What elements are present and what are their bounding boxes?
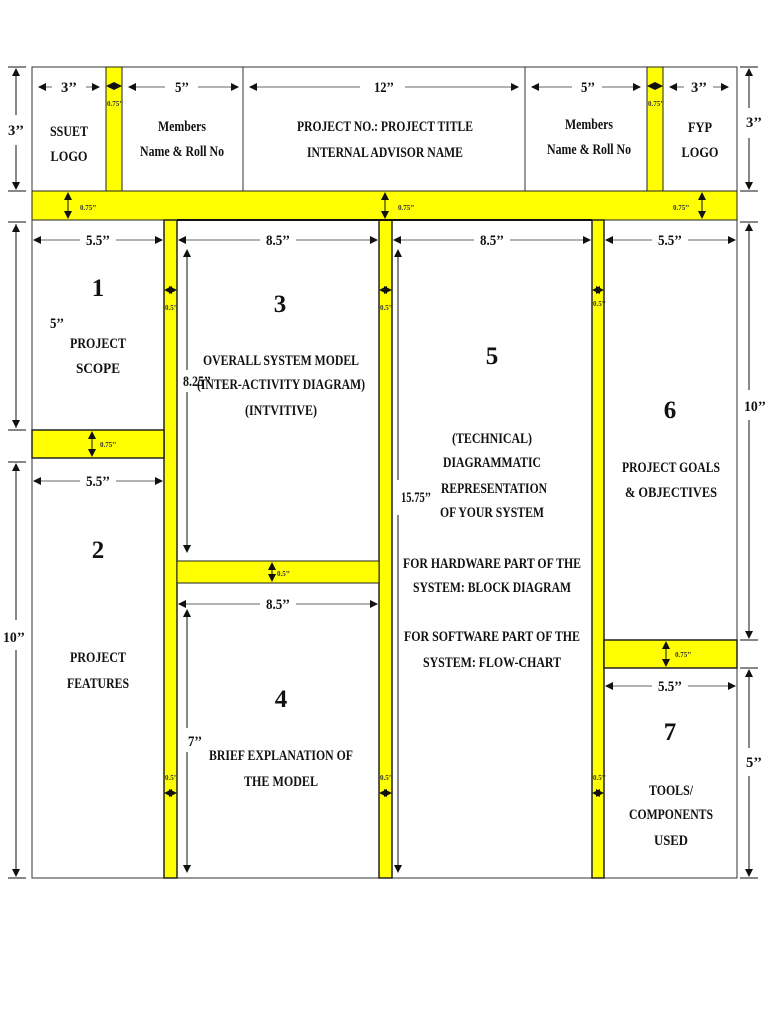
panel 7: tools: TOOLS/ bbox=[649, 783, 694, 799]
outer vertical dimensions: 3’’ bbox=[8, 123, 24, 139]
small dimension labels: 0.5’’ bbox=[165, 774, 178, 782]
header: members right: Members bbox=[565, 117, 613, 133]
panel 6: project goals: PROJECT GOALS bbox=[622, 460, 720, 476]
header: members left: 5’’ bbox=[175, 80, 189, 96]
small dimension labels: 0.5’’ bbox=[593, 774, 606, 782]
panel 5: technical diagram: 5 bbox=[486, 343, 498, 370]
header: SSUET logo: LOGO bbox=[50, 149, 88, 165]
panel 7: tools: 5.5’’ bbox=[658, 679, 682, 695]
panel 7: tools: 7 bbox=[664, 719, 676, 746]
panel 7: tools bbox=[606, 679, 735, 849]
panel 2: project features: 2 bbox=[92, 537, 104, 564]
header: members right: 5’’ bbox=[581, 80, 595, 96]
small dimension labels: 0.75’’ bbox=[107, 100, 123, 108]
small dimension labels: 0.75’’ bbox=[675, 651, 691, 659]
panel 5: technical diagram: FOR SOFTWARE PART OF THE bbox=[404, 629, 580, 645]
panel 5: technical diagram: SYSTEM: FLOW-CHART bbox=[423, 655, 561, 671]
panel 3: overall system model bbox=[179, 233, 377, 552]
header: members right bbox=[532, 80, 640, 158]
panel 1: project scope: 5.5’’ bbox=[86, 233, 110, 249]
outer vertical dimensions bbox=[3, 67, 766, 878]
small dimension labels: 0.75’’ bbox=[80, 204, 96, 212]
panel 5: technical diagram: FOR HARDWARE PART OF THE bbox=[403, 556, 581, 572]
small dimension labels bbox=[68, 86, 702, 782]
panel 1: project scope: 5’’ bbox=[50, 316, 64, 332]
yellow separators bbox=[32, 67, 737, 878]
small dimension labels: 0.75’’ bbox=[673, 204, 689, 212]
panel 2: project features bbox=[34, 474, 162, 692]
panel 5: technical diagram: SYSTEM: BLOCK DIAGRAM bbox=[413, 580, 571, 596]
panel 5: technical diagram: 15.75’’ bbox=[401, 490, 431, 506]
column width arrows bbox=[165, 290, 603, 793]
panel 3: overall system model: OVERALL SYSTEM MODEL bbox=[203, 353, 359, 369]
panel 6: project goals bbox=[606, 233, 735, 501]
small dimension labels: 0.5’’ bbox=[165, 304, 178, 312]
header: project title: INTERNAL ADVISOR NAME bbox=[307, 145, 463, 161]
header: SSUET logo: 3’’ bbox=[61, 80, 77, 96]
header: FYP logo bbox=[670, 80, 728, 161]
header: members left bbox=[129, 80, 238, 160]
small dimension labels: 0.75’’ bbox=[398, 204, 414, 212]
panel 6: project goals: 6 bbox=[664, 397, 676, 424]
outer vertical dimensions: 10’’ bbox=[3, 630, 25, 646]
header: members right: Name & Roll No bbox=[547, 142, 631, 158]
panel 1: project scope bbox=[34, 233, 162, 377]
panel 6: project goals: 5.5’’ bbox=[658, 233, 682, 249]
panel 3: overall system model: 8.5’’ bbox=[266, 233, 290, 249]
panel 3: overall system model: 3 bbox=[274, 291, 286, 318]
header: project title: 12’’ bbox=[374, 80, 394, 96]
outer vertical dimensions: 10’’ bbox=[744, 399, 766, 415]
panel 4: brief explanation: THE MODEL bbox=[244, 774, 318, 790]
panel 4: brief explanation: 8.5’’ bbox=[266, 597, 290, 613]
outer vertical dimensions: 3’’ bbox=[746, 115, 762, 131]
panel 1: project scope: PROJECT bbox=[70, 336, 126, 352]
panel 1: project scope: 1 bbox=[92, 275, 104, 302]
panel 7: tools: USED bbox=[654, 833, 688, 849]
small dimension labels: 0.5’’ bbox=[380, 774, 393, 782]
header: SSUET logo: SSUET bbox=[50, 124, 88, 140]
panel 3: overall system model: (INTVITIVE) bbox=[245, 403, 317, 419]
panel 5: technical diagram: DIAGRAMMATIC bbox=[443, 455, 541, 471]
header: project title: PROJECT NO.: PROJECT TITLE bbox=[297, 119, 473, 135]
header: FYP logo: LOGO bbox=[682, 145, 718, 161]
panel 1: project scope: SCOPE bbox=[76, 361, 120, 377]
outer vertical dimensions: 5’’ bbox=[746, 755, 762, 771]
small dimension labels: 0.75’’ bbox=[100, 441, 116, 449]
header: SSUET logo bbox=[39, 80, 99, 165]
header: project title bbox=[250, 80, 518, 161]
board frame bbox=[32, 67, 737, 878]
panel 5: technical diagram: 8.5’’ bbox=[480, 233, 504, 249]
panel 2: project features: FEATURES bbox=[67, 676, 129, 692]
panel 5: technical diagram: (TECHNICAL) bbox=[452, 431, 532, 447]
panel 2: project features: 5.5’’ bbox=[86, 474, 110, 490]
panel 3: overall system model: (INTER-ACTIVITY DIAGRAM) bbox=[197, 377, 365, 393]
small dimension labels: 0.5’’ bbox=[380, 304, 393, 312]
panel 4: brief explanation bbox=[179, 597, 377, 872]
panel 5: technical diagram: OF YOUR SYSTEM bbox=[440, 505, 544, 521]
panel 5: technical diagram: REPRESENTATION bbox=[441, 481, 547, 497]
header: members left: Name & Roll No bbox=[140, 144, 224, 160]
panel 4: brief explanation: 7’’ bbox=[188, 734, 202, 750]
header: FYP logo: FYP bbox=[688, 120, 712, 136]
header: FYP logo: 3’’ bbox=[691, 80, 707, 96]
panel 4: brief explanation: BRIEF EXPLANATION OF bbox=[209, 748, 353, 764]
small dimension labels: 0.5’’ bbox=[277, 570, 290, 578]
panel 4: brief explanation: 4 bbox=[275, 686, 288, 713]
panel 6: project goals: & OBJECTIVES bbox=[625, 485, 717, 501]
panel 3: overall system model: 8.25’’ bbox=[183, 374, 211, 390]
panel 5: technical diagram bbox=[394, 233, 590, 872]
small dimension labels: 0.75’’ bbox=[648, 100, 664, 108]
panel 2: project features: PROJECT bbox=[70, 650, 126, 666]
small dimension labels: 0.5’’ bbox=[593, 300, 606, 308]
panel 7: tools: COMPONENTS bbox=[629, 807, 713, 823]
header: members left: Members bbox=[158, 119, 206, 135]
